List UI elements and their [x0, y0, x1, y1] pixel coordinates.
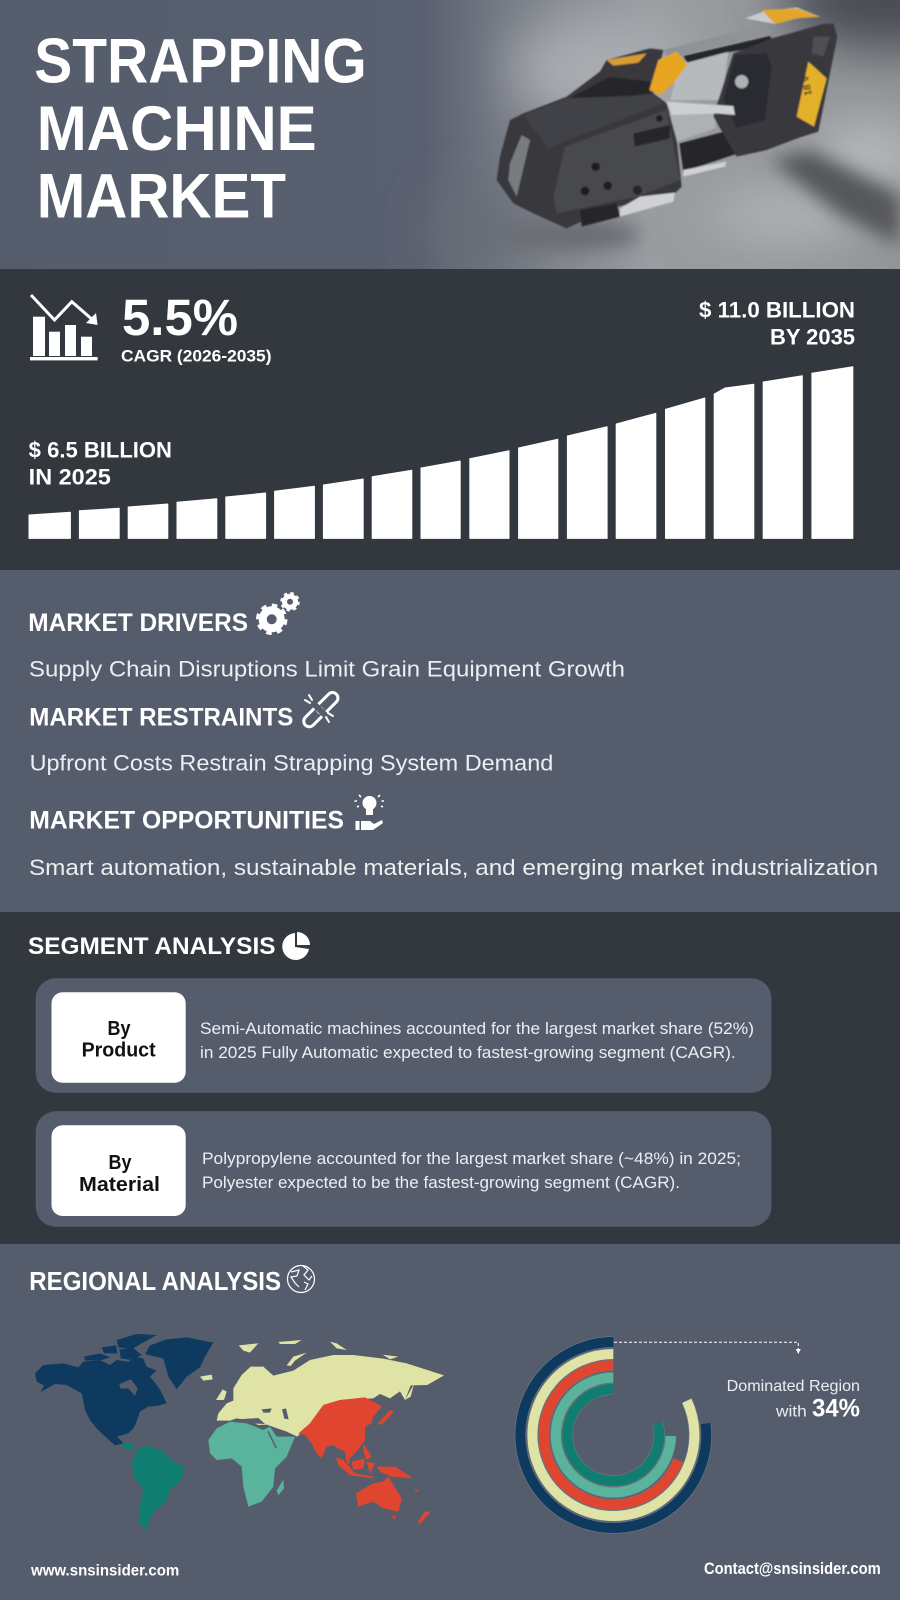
icon: globe	[288, 1266, 314, 1292]
heading: market opportunities: MARKET OPPORTUNITIES	[29, 807, 344, 835]
red sea	[267, 1431, 277, 1449]
bar chart	[29, 367, 853, 538]
title: MACHINE	[37, 94, 317, 164]
end value label	[699, 297, 855, 350]
ring halos	[520, 1342, 706, 1528]
icon: pie chart	[282, 932, 310, 960]
footer: contact email: Contact@snsinsider.com	[704, 1560, 881, 1578]
icon: gears	[258, 593, 298, 633]
title: MARKET	[37, 161, 286, 231]
panel: regional analysis	[0, 1244, 900, 1600]
callout: dominated region: with	[775, 1404, 807, 1421]
icon: strapping machine photo	[497, 7, 837, 228]
label: by material: Material	[79, 1174, 160, 1196]
title: STRAPPING	[34, 27, 367, 97]
heading: market drivers: MARKET DRIVERS	[28, 609, 248, 637]
ring: north america	[520, 1342, 706, 1528]
ring: south america	[567, 1389, 659, 1481]
inland seas	[237, 1408, 289, 1424]
end value label: BY 2035	[770, 325, 855, 350]
icon: bulb in hand	[354, 795, 384, 830]
label: by material	[52, 1125, 186, 1216]
icon: declining chart	[30, 295, 98, 360]
label: by material: By	[108, 1152, 132, 1174]
callout: dominated region	[727, 1378, 860, 1423]
text: product share	[200, 1019, 754, 1062]
start value label: IN 2025	[29, 465, 111, 490]
panel: header	[424, 0, 900, 269]
ring: asia pacific	[544, 1365, 678, 1505]
region: eurasia	[200, 1340, 444, 1437]
arrow: dashed leader	[614, 1342, 801, 1354]
hudson bay	[119, 1379, 138, 1396]
heading: segment analysis: SEGMENT ANALYSIS	[28, 933, 276, 960]
card: by product	[36, 978, 771, 1093]
callout: dominated region: Dominated Region	[727, 1378, 860, 1395]
heading: regional analysis: REGIONAL ANALYSIS	[29, 1268, 281, 1296]
region: north america	[35, 1334, 213, 1445]
end value label: $ 11.0 BILLION	[699, 297, 855, 322]
card: by material	[36, 1111, 771, 1227]
panel: market size	[0, 269, 900, 570]
ring: africa	[556, 1378, 671, 1492]
text: material share: Polyester expected to be the fastest-growing segment (CAGR).	[202, 1173, 680, 1192]
icon: strapping machine photo: 18 V	[800, 74, 815, 96]
chart: radial share rings	[520, 1342, 706, 1528]
text: material share: Polypropylene accounted for the largest market share (~48%) in 2025;	[202, 1149, 741, 1168]
panel: market dynamics	[0, 570, 900, 912]
footer: website: www.snsinsider.com	[30, 1562, 179, 1579]
CAGR value: 5.5%	[122, 289, 238, 346]
heading: market restraints: MARKET RESTRAINTS	[29, 703, 293, 731]
text: material share	[202, 1149, 741, 1192]
start value label	[29, 437, 172, 490]
label: by product: By	[108, 1018, 131, 1040]
title	[34, 27, 367, 231]
text: market restraint: Upfront Costs Restrain Strapping System Demand	[30, 751, 553, 776]
CAGR label: CAGR (2026-2035)	[121, 347, 272, 366]
region: africa and middle east	[208, 1422, 295, 1507]
text: market driver: Supply Chain Disruptions Limit Grain Equipment Growth	[29, 657, 625, 682]
label: by product: Product	[82, 1040, 156, 1062]
world map	[35, 1334, 444, 1531]
start value label: $ 6.5 BILLION	[29, 437, 172, 462]
region: asia pacific	[298, 1397, 431, 1524]
callout: dominated region: 34%	[812, 1395, 860, 1423]
text: product share: in 2025 Fully Automatic expected to fastest-growing segment (CAGR).	[200, 1043, 736, 1062]
label: by product	[52, 992, 186, 1083]
region: south america	[121, 1442, 185, 1531]
text: product share: Semi-Automatic machines accounted for the largest market share (52%)	[200, 1019, 754, 1038]
ring: eurasia	[532, 1354, 694, 1516]
icon: broken chain	[301, 690, 340, 729]
text: market opportunity: Smart automation, sustainable materials, and emerging market industrialization	[29, 855, 878, 880]
panel: segment analysis	[0, 912, 900, 1244]
